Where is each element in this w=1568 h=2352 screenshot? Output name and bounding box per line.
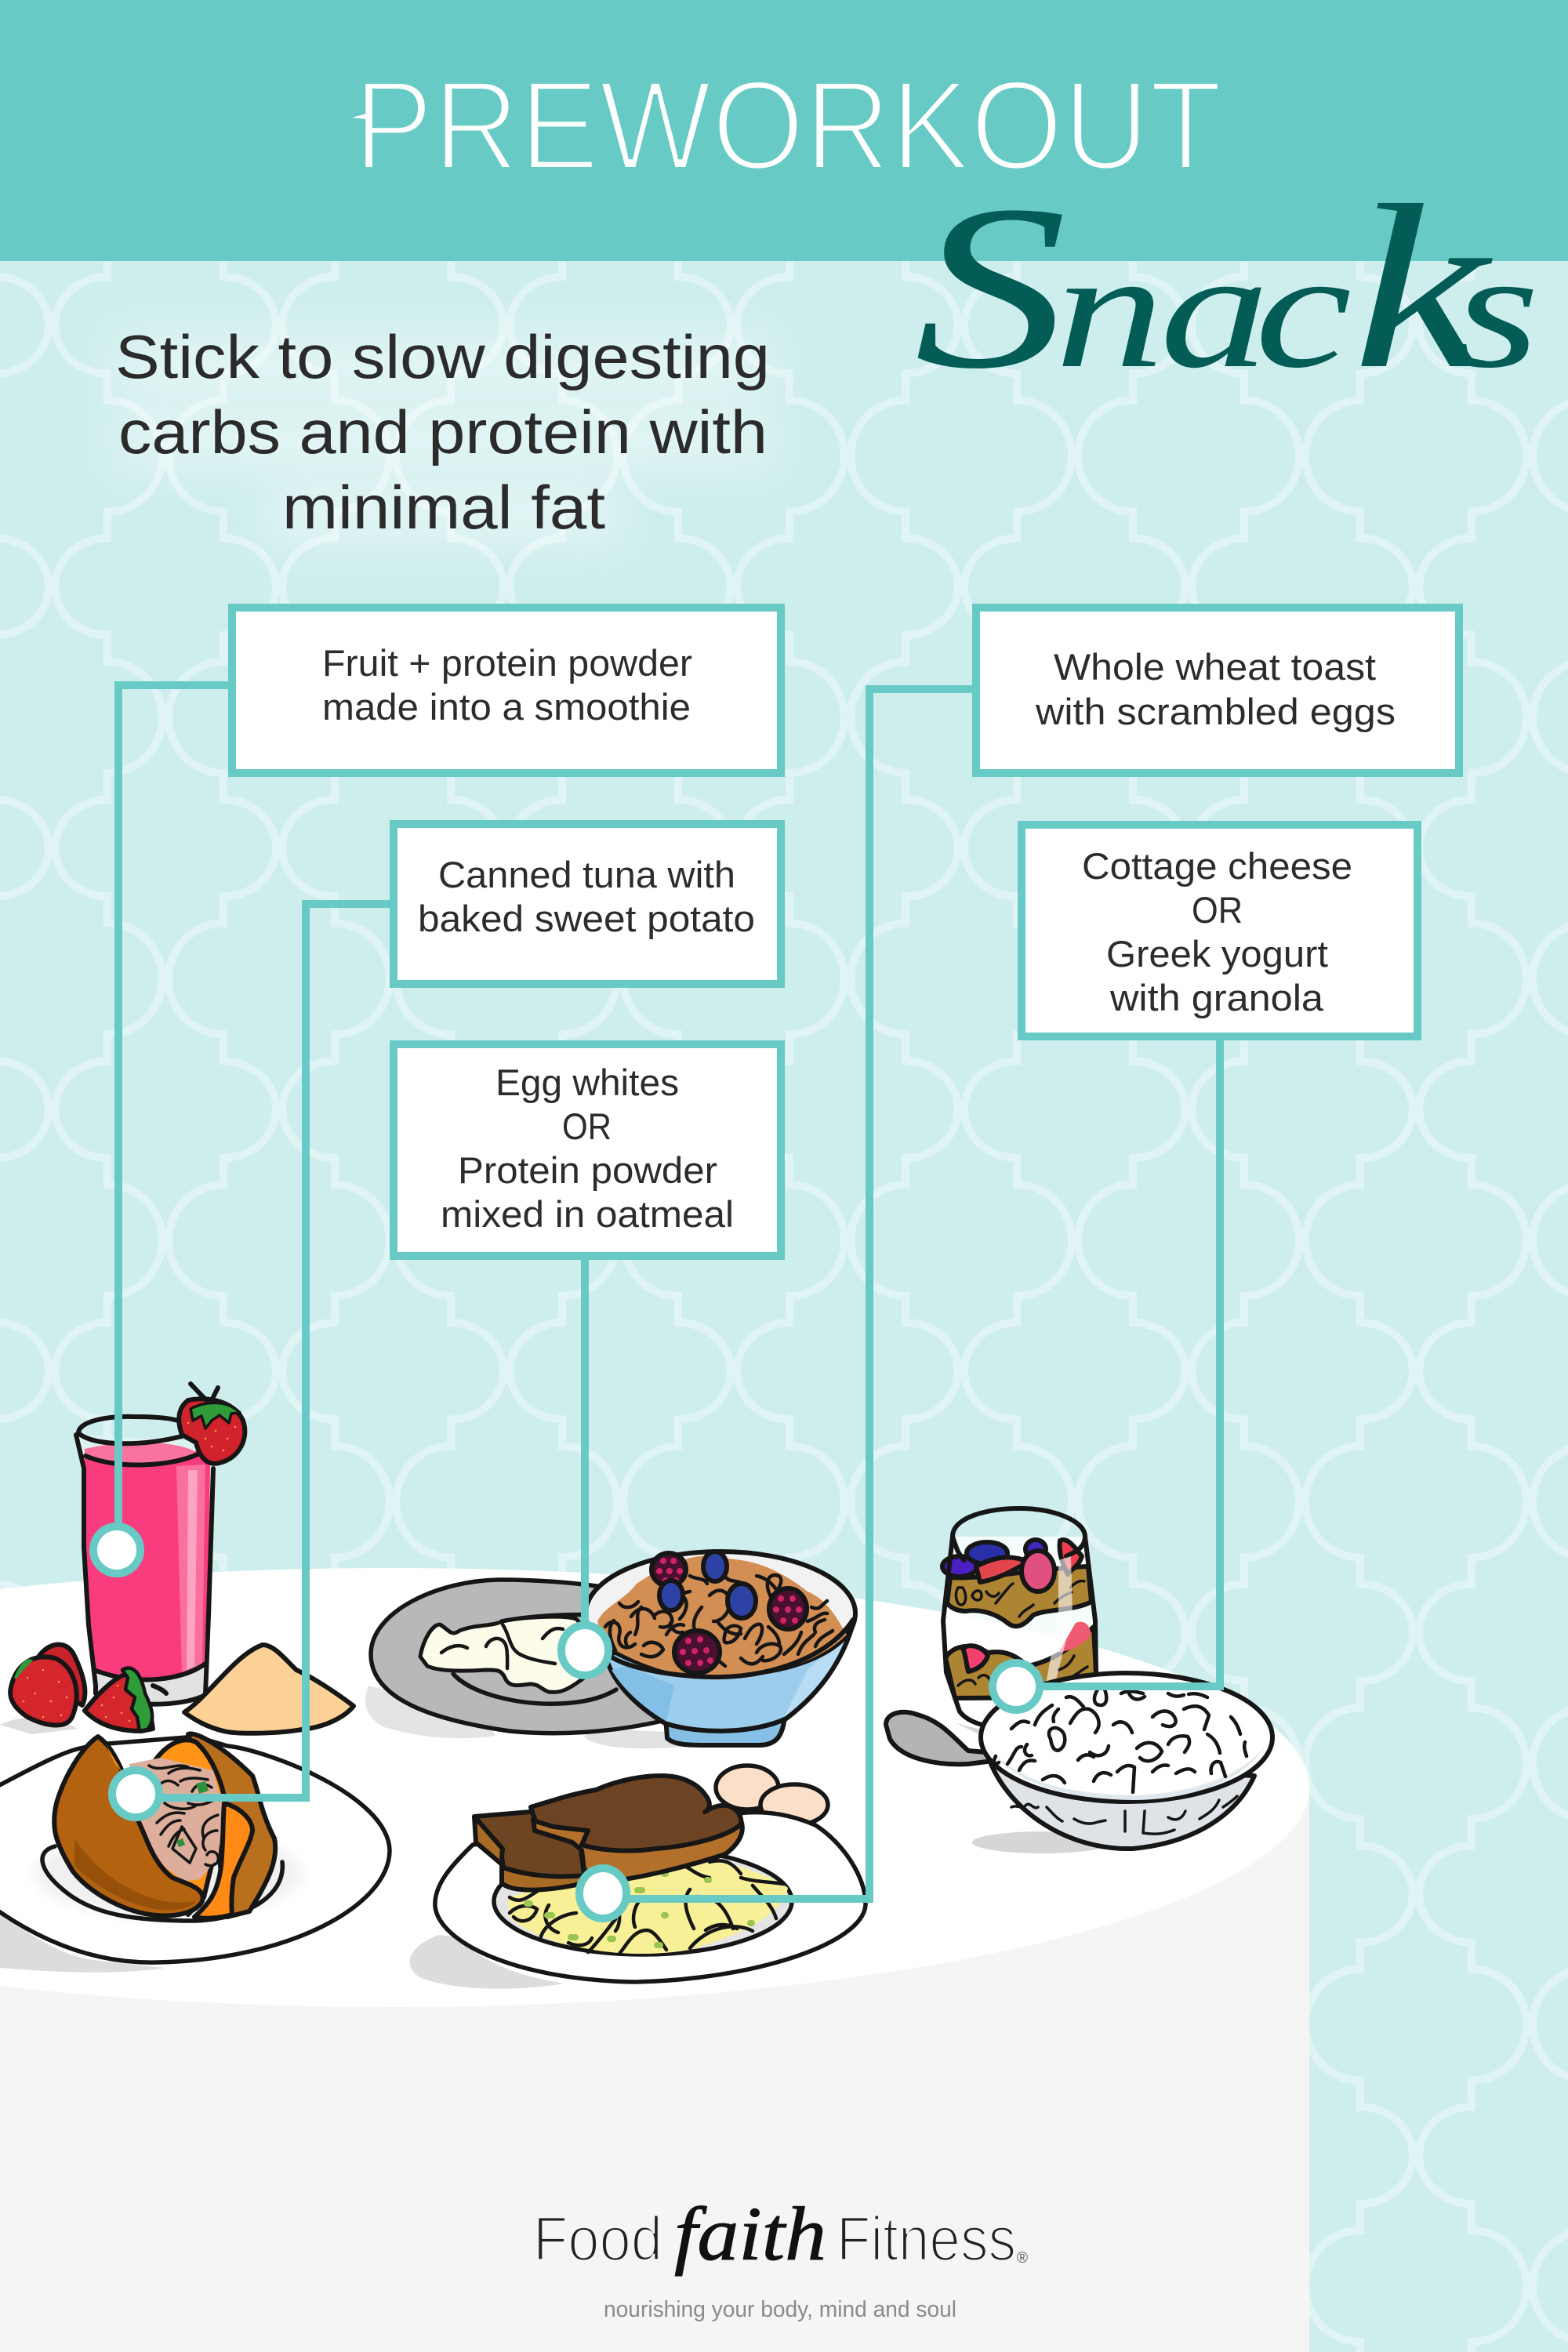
box: tuna and sweet potato — [394, 824, 781, 984]
front toast — [533, 1819, 742, 1882]
plate shadow — [0, 1913, 165, 1973]
food: cottage cheese bowl — [972, 1673, 1272, 1853]
box: cottage cheese or greek yogurt: OR — [1192, 889, 1243, 931]
glass outline — [943, 1508, 1096, 1730]
box: egg whites or protein oatmeal: OR — [562, 1105, 612, 1147]
title: Snacks script: S — [914, 158, 1067, 418]
parfait glass — [943, 1537, 1096, 1725]
logo: Food faith Fitness: ® — [1017, 2250, 1028, 2267]
table — [0, 1568, 1309, 2352]
glass highlight — [1043, 1556, 1073, 1701]
header band — [0, 0, 1568, 261]
box: egg whites or protein oatmeal — [394, 1044, 781, 1256]
box: smoothie — [232, 608, 781, 773]
logo: Food faith Fitness: Fitness — [837, 2204, 1016, 2274]
bowl body — [991, 1764, 1254, 1849]
bowl body — [605, 1619, 855, 1731]
logo: Food faith Fitness: Food — [533, 2204, 662, 2274]
box: toast with eggs: with scrambled eggs — [1035, 691, 1396, 732]
blackberries — [652, 1553, 807, 1673]
connector: sweet potato — [161, 904, 390, 1798]
connector: toast and eggs — [627, 689, 975, 1899]
box: toast with eggs — [976, 608, 1459, 773]
subtitle with soft glow: Stick to slow digesting — [115, 322, 770, 391]
shadows — [0, 1718, 78, 1734]
berries on top — [942, 1556, 977, 1577]
subtitle with soft glow — [115, 322, 770, 542]
upper granola layer — [947, 1566, 1091, 1626]
potato right skin — [188, 1733, 275, 1917]
blueberries — [703, 1552, 727, 1581]
logo: Food faith Fitness — [533, 2192, 1028, 2322]
food: sweet potato with tuna on plate — [0, 1733, 390, 1973]
strawberries on table — [38, 1645, 85, 1705]
box: smoothie: Fruit + protein powder — [322, 642, 692, 684]
marker: sweet potato — [112, 1770, 159, 1817]
box: egg whites or protein oatmeal: Protein powder — [458, 1149, 717, 1191]
cottage cheese curds — [994, 1688, 1247, 1792]
title: Snacks script: c — [1254, 216, 1352, 403]
box: smoothie: made into a smoothie — [322, 686, 691, 728]
subtitle with soft glow: carbs and protein with — [118, 397, 768, 466]
logo: Food faith Fitness: faith — [674, 2192, 826, 2277]
food: egg whites on grey plate — [365, 1580, 681, 1748]
bowl shadow — [972, 1831, 1113, 1853]
box: egg whites or protein oatmeal: Egg whites — [495, 1062, 679, 1103]
box: cottage cheese or greek yogurt: with granola — [1109, 977, 1324, 1018]
food: toast and scrambled eggs on plate — [410, 1766, 866, 1989]
box: cottage cheese or greek yogurt: Greek yogurt — [1106, 933, 1328, 975]
box: egg whites or protein oatmeal: mixed in oatmeal — [441, 1193, 734, 1235]
parfait shadow — [953, 1722, 1035, 1744]
marker: toast and eggs — [579, 1868, 626, 1918]
glass — [78, 1435, 216, 1704]
inner rim — [453, 1614, 616, 1704]
bowl rim — [586, 1552, 855, 1675]
box: tuna and sweet potato: Canned tuna with — [438, 854, 735, 895]
strawberry pieces — [963, 1646, 988, 1671]
smoothie liquid — [84, 1449, 210, 1679]
plate shadow — [410, 1935, 564, 1989]
box: cottage cheese or greek yogurt: Cottage cheese — [1082, 845, 1352, 887]
spoon — [886, 1712, 1011, 1764]
plate — [0, 1737, 390, 1962]
granola squiggles — [956, 1581, 1087, 1686]
plate shadow — [365, 1686, 495, 1738]
lower granola layer — [946, 1627, 1096, 1698]
marker: parfait — [993, 1663, 1040, 1710]
potato left skin — [54, 1737, 203, 1915]
tagline: nourishing your body, mind and soul — [604, 2297, 956, 2322]
connector: oatmeal — [581, 1258, 589, 1623]
title: Snacks script: a — [1160, 216, 1269, 403]
orange flesh top — [141, 1740, 226, 1915]
title: Snacks script: k — [1352, 158, 1496, 418]
box: cottage cheese or greek yogurt — [1022, 825, 1417, 1036]
oat bowl shadow — [584, 1730, 681, 1748]
plate inner shadow — [35, 1831, 302, 1917]
strawberry on rim — [179, 1399, 245, 1464]
bowl foot — [666, 1717, 785, 1745]
title: Snacks script: n — [1055, 216, 1164, 403]
marker: oatmeal — [561, 1625, 608, 1675]
subtitle with soft glow: minimal fat — [282, 473, 605, 542]
bowl pattern — [1011, 1796, 1237, 1834]
scrambled egg — [508, 1858, 788, 1954]
marker: smoothie — [93, 1526, 140, 1573]
tuna filling — [129, 1758, 223, 1882]
eggs in shell — [716, 1766, 779, 1809]
egg whites — [420, 1617, 608, 1692]
outer rim — [981, 1673, 1272, 1802]
connector: parfait and cottage cheese — [1043, 1039, 1220, 1686]
box: tuna and sweet potato: baked sweet potato — [418, 898, 755, 939]
food: yogurt parfait and spoon — [886, 1508, 1096, 1764]
plate — [435, 1813, 866, 1982]
grey plate — [371, 1580, 674, 1733]
granola — [597, 1555, 847, 1676]
connector: smoothie — [118, 685, 230, 1525]
food: smoothie with strawberries and protein powder — [0, 1384, 354, 1734]
flesh strip — [194, 1803, 252, 1918]
inner plate — [494, 1848, 792, 1955]
back toast — [474, 1817, 584, 1890]
protein powder pile — [184, 1645, 354, 1733]
box: toast with eggs: Whole wheat toast — [1054, 646, 1376, 688]
title: Snacks script: s — [1454, 216, 1540, 403]
food: oatmeal bowl with berries — [586, 1552, 855, 1745]
title: PREWORKOUT: PREWORKOUT — [354, 53, 1222, 197]
